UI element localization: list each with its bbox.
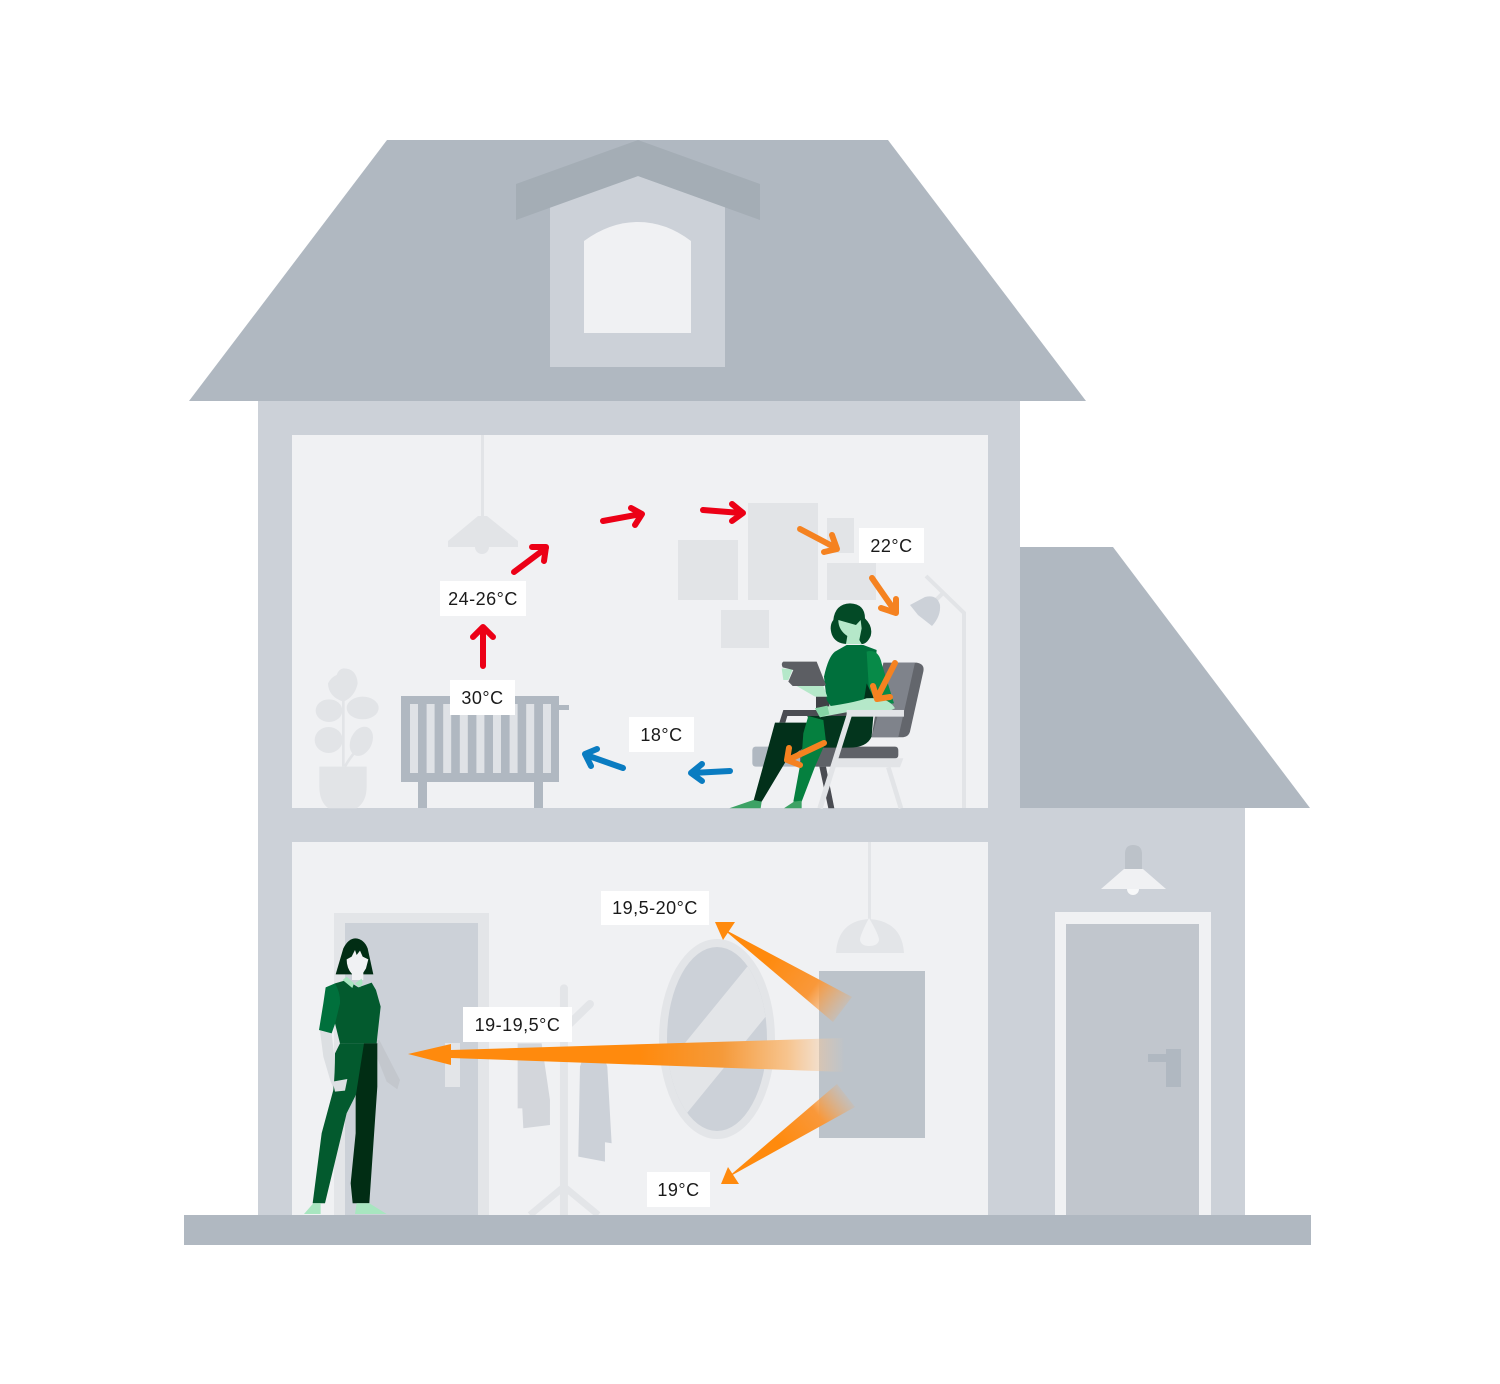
label: 19°C (647, 1172, 710, 1207)
seated woman in armchair (729, 603, 924, 808)
blue arrow: right (691, 764, 730, 781)
hand (333, 1079, 347, 1092)
label: 24-26°C (440, 581, 526, 616)
orange arrow: toward head (872, 578, 896, 613)
armchair (752, 663, 924, 808)
orange arrow: on leg (787, 743, 824, 765)
main roof (189, 140, 1086, 401)
label: 19-19,5°C (463, 1007, 572, 1042)
neck and face (838, 620, 862, 644)
far arm (375, 1040, 400, 1089)
sweater (335, 980, 381, 1043)
red arrow: diagonal (514, 547, 546, 572)
label: 18°C: 18°C (640, 725, 683, 745)
dormer window (584, 222, 691, 333)
wall panel radiator (819, 971, 925, 1138)
sleeve (319, 983, 340, 1033)
label: 19°C: 19°C (657, 1180, 700, 1200)
near arm (320, 1031, 347, 1092)
upper room (292, 435, 988, 808)
label: 19,5-20°C: 19,5-20°C (612, 898, 698, 918)
red arrow: radiator up (473, 627, 493, 666)
pendant lamp (448, 435, 518, 554)
blue arrow: left (585, 749, 623, 768)
label: 18°C (629, 717, 694, 752)
trousers far leg (351, 1043, 377, 1203)
orange arrow: on arm (873, 663, 895, 699)
red arrow: ceiling one (603, 508, 642, 525)
upper room decor (315, 435, 964, 808)
far arm (867, 651, 894, 707)
torso (824, 645, 877, 710)
front leg (793, 716, 826, 802)
interior door (334, 913, 489, 1215)
hair (831, 603, 871, 644)
red arrow: ceiling two (703, 504, 743, 521)
back leg (753, 723, 810, 802)
orange beam: lower (721, 1084, 855, 1184)
door handle (1148, 1049, 1181, 1087)
chair front frame (820, 715, 849, 808)
door leaf (1066, 924, 1199, 1215)
face and neck (347, 950, 368, 980)
orange beam: middle (408, 1038, 845, 1072)
lower room (292, 842, 988, 1215)
shoes (304, 1203, 387, 1214)
label: 19,5-20°C (601, 891, 709, 925)
dormer gable (516, 140, 760, 220)
label: 19-19,5°C: 19-19,5°C (475, 1015, 560, 1035)
collar (343, 977, 363, 988)
mirror (659, 939, 780, 1140)
near forearm (815, 698, 895, 717)
side extension roof (1020, 547, 1310, 808)
holding hand and arm (782, 668, 793, 680)
lap and thigh (807, 716, 873, 748)
orange arrow: top (800, 529, 837, 552)
house structure (189, 140, 1310, 1215)
lower pendant lamp (836, 842, 904, 953)
radiator (401, 696, 569, 808)
label: 30°C (450, 680, 515, 715)
trousers near leg (313, 1043, 377, 1203)
standing woman (304, 938, 400, 1214)
main wall (258, 401, 1020, 1215)
dormer wall (550, 176, 725, 367)
wall lamp (1101, 845, 1166, 895)
label: 22°C (859, 528, 924, 563)
tablet (782, 662, 826, 686)
floor lamp (910, 576, 964, 808)
coat rack (518, 988, 612, 1215)
label: 30°C: 30°C (461, 688, 504, 708)
label: 24-26°C: 24-26°C (448, 589, 518, 609)
exterior door and lamp (1055, 845, 1211, 1215)
ground (184, 1215, 1311, 1245)
picture frames (678, 503, 876, 648)
hair (336, 938, 373, 974)
side extension wall (1020, 808, 1245, 1215)
orange beam: upper (715, 922, 852, 1022)
plant (315, 668, 379, 808)
label: 22°C: 22°C (870, 536, 913, 556)
shoes (729, 800, 802, 808)
door frame (1055, 912, 1211, 1215)
